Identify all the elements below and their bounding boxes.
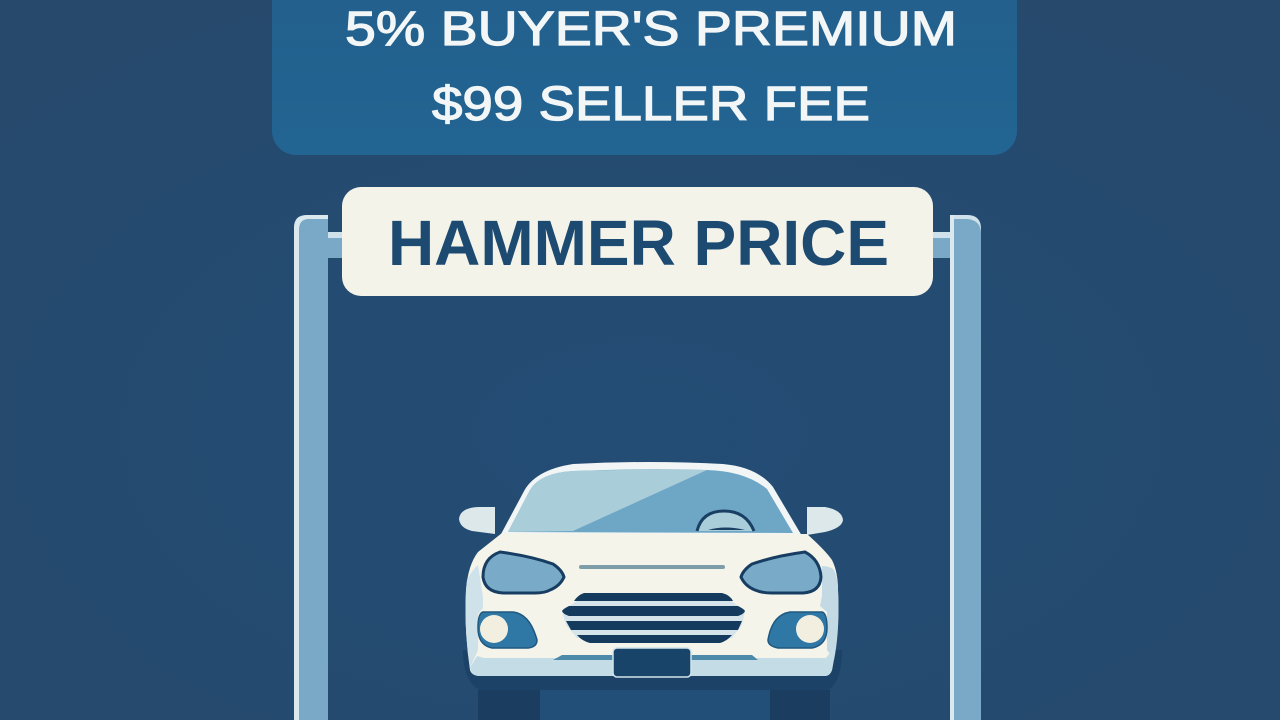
left mirror <box>459 507 495 534</box>
hammer price sign <box>342 187 933 296</box>
text: hammer price: HAMMER PRICE <box>388 207 889 279</box>
right body shade <box>820 566 838 660</box>
grille <box>562 593 745 643</box>
left headlight <box>483 552 564 593</box>
right post <box>950 215 981 720</box>
windshield highlight <box>508 470 707 532</box>
windshield frame <box>500 462 802 536</box>
left wheel <box>478 690 540 720</box>
crossbar <box>328 232 950 258</box>
license plate <box>613 648 691 677</box>
body <box>466 533 838 676</box>
text: seller fee: $99 SELLER FEE <box>432 78 870 131</box>
right headlight <box>741 552 821 593</box>
lift frame <box>294 215 981 720</box>
bumper groove <box>553 655 758 660</box>
under-car shade <box>540 690 771 720</box>
car shadow <box>463 650 842 690</box>
hood line <box>579 565 725 569</box>
right mirror <box>807 507 843 535</box>
right wheel <box>770 690 830 720</box>
right fog lamp <box>768 612 827 648</box>
lower bumper <box>470 645 836 676</box>
left body shade <box>466 565 483 668</box>
text: buyer's premium: 5% BUYER'S PREMIUM <box>345 3 957 56</box>
banner: fees <box>272 0 1017 155</box>
steering wheel <box>697 511 754 531</box>
windshield glass <box>508 469 793 533</box>
left fog lamp <box>478 612 537 648</box>
car <box>459 462 843 720</box>
left post <box>294 215 328 720</box>
